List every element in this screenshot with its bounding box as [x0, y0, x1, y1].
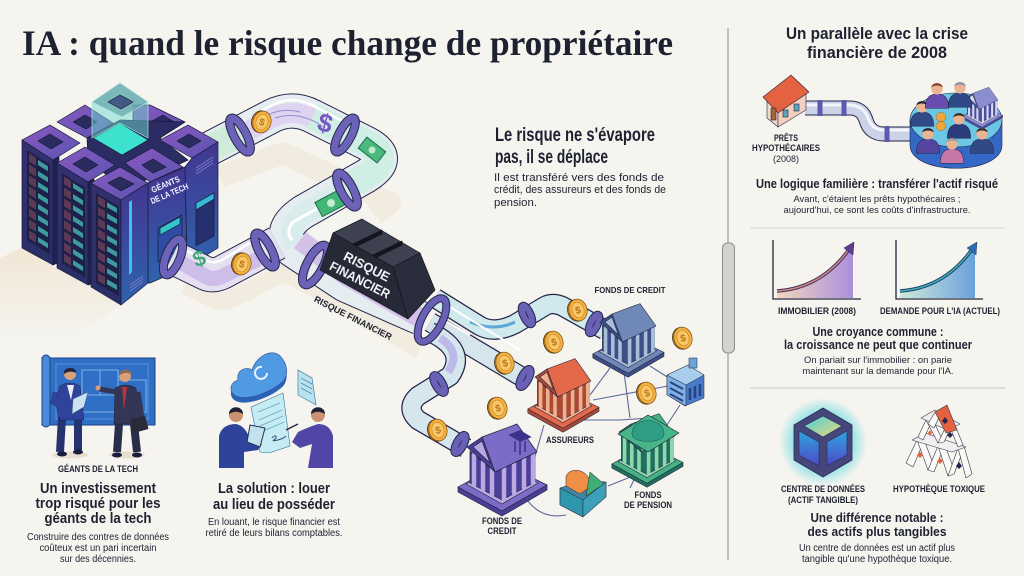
- cloud: [231, 353, 287, 403]
- icon: house of cards: [906, 405, 972, 478]
- heading: différence notable: des actifs plus tangibles: [808, 524, 946, 539]
- text: croyance description: maintenant sur la demande pour l'IA.: [802, 366, 954, 377]
- text: investment description: Construire des contres de données: [27, 532, 169, 543]
- bank icon on roof: [510, 431, 530, 455]
- text: risk transfer description: Il est transféré vers des fonds de: [494, 172, 664, 184]
- small building: teal office with orange block: [560, 470, 606, 517]
- rack 2: [57, 147, 115, 285]
- label: prêts hypothécaires: (2008): [773, 154, 799, 164]
- heading: le risque ne s'évapore: [495, 125, 655, 168]
- label: demande IA: DEMANDE POUR L'IA (ACTUEL): [880, 306, 1000, 317]
- text: investment description: [27, 532, 169, 565]
- label: centre de données: (ACTIF TANGIBLE): [788, 495, 858, 506]
- rack 4 with label: [125, 148, 190, 283]
- label: prêts hypothécaires: PRÊTS: [774, 132, 798, 143]
- icon: green banknote lower: [315, 189, 347, 217]
- label: prêts hypothécaires: HYPOTHÉCAIRES: [752, 143, 820, 153]
- rack 1: [22, 125, 80, 265]
- icon: gold coin in lower pipe: [229, 251, 254, 277]
- glowing cyan top: [93, 123, 148, 155]
- heading: investissement trop risqué: [36, 480, 160, 527]
- rack label: [145, 172, 190, 206]
- central dark block: [87, 120, 188, 190]
- rack 3: [91, 167, 148, 305]
- heading: 2008 parallel: Un parallèle avec la crise: [786, 24, 968, 43]
- blueprint: [42, 355, 155, 427]
- heading: différence notable: Une différence notable :: [810, 510, 944, 525]
- risk block label: RISQUE: [341, 249, 393, 285]
- text: risk transfer description: pension.: [494, 197, 537, 209]
- label: fonds de credit (bottom): [482, 516, 522, 536]
- heading: 2008 parallel: financière de 2008: [807, 43, 947, 62]
- coins around institutions: [425, 297, 695, 443]
- label: immobilier: IMMOBILIER (2008): [778, 306, 856, 317]
- title: IA : quand le risque change de propriétaire: [22, 23, 673, 63]
- text: logique description: aujourd'hui, ce sont les coûts d'infrastructure.: [784, 205, 970, 216]
- pipe: lower transfer pipe: [172, 243, 277, 278]
- pipe: upper transfer pipe: [205, 100, 420, 318]
- label: fonds de pension: DE PENSION: [624, 500, 672, 510]
- diagram: data centre racks and risk pipeline: [22, 83, 704, 517]
- text: solution description: En louant, le risque financier est: [208, 517, 340, 528]
- label: assureurs: ASSUREURS: [546, 435, 594, 445]
- label: fonds de credit (top): FONDS DE CREDIT: [594, 285, 666, 295]
- text: solution description: retiré de leurs bilans comptables.: [206, 528, 342, 539]
- heading: la solution: au lieu de posséder: [213, 496, 335, 513]
- text: investment description: coûteux est un pari incertain: [40, 543, 156, 554]
- network arrows: [524, 366, 680, 516]
- label: fonds de credit (bottom): FONDS DE: [482, 516, 522, 526]
- illustration: tech executives before blueprint: [42, 355, 155, 458]
- icon: green dollar: $: [189, 245, 209, 272]
- label: hypothèque toxique: HYPOTHÈQUE TOXIQUE: [893, 484, 985, 495]
- text: différence description: [799, 543, 955, 565]
- rack label: DE LA TECH: [149, 181, 190, 206]
- label: géants de la tech: GÉANTS DE LA TECH: [58, 464, 138, 475]
- small building: blue office: [667, 358, 704, 406]
- contract: [251, 393, 290, 453]
- pipe label: RISQUE FINANCIER: [312, 294, 394, 342]
- floor shadows: [52, 452, 88, 458]
- heading: la solution: [213, 480, 335, 513]
- man with briefcase: [96, 369, 149, 458]
- text: logique description: Avant, c'étaient les prêts hypothécaires ;: [794, 194, 960, 205]
- coins in the disc: [936, 112, 946, 130]
- pipe flange rings: [159, 115, 361, 288]
- label: fonds de credit (bottom): CREDIT: [488, 526, 517, 536]
- heading: croyance commune: Une croyance commune :: [812, 324, 944, 339]
- chart: demande IA: [896, 240, 983, 299]
- text: logique description: [784, 194, 970, 216]
- house: [763, 75, 809, 127]
- person left: [219, 407, 265, 468]
- text: différence description: tangible qu'une hypothèque toxique.: [802, 554, 952, 565]
- rack: back right: [133, 105, 185, 138]
- illustration: leasing contract with cloud: [219, 353, 333, 468]
- icon: purple dollar: $: [314, 107, 337, 139]
- investors disc: [910, 93, 1002, 168]
- heading: différence notable: [808, 510, 946, 539]
- pipe: [805, 100, 915, 142]
- label: centre de données: CENTRE DE DONNÉES: [781, 484, 865, 495]
- heading: investissement trop risqué: Un investissement: [40, 480, 156, 497]
- bank: orange insurers: [528, 359, 599, 432]
- investor figures: [910, 82, 994, 163]
- rack: back left: [57, 105, 113, 138]
- icon: green banknote: [358, 137, 386, 163]
- heading: la solution: La solution : louer: [218, 480, 330, 497]
- illustration: mortgage pipe to investors: [763, 75, 1003, 168]
- label: centre de données: [781, 484, 865, 506]
- label: fonds de pension: FONDS: [634, 490, 662, 500]
- heading: investissement trop risqué: géants de la tech: [44, 510, 152, 527]
- risk block label: FINANCIER: [327, 258, 393, 302]
- bank: blue credit fund: [593, 304, 664, 377]
- racks: [22, 83, 218, 305]
- heading: le risque ne s'évapore: Le risque ne s'évapore: [495, 125, 655, 146]
- text: risk transfer description: crédit, des assureurs et des fonds de: [494, 184, 666, 196]
- shadow under racks and pipes: [0, 153, 420, 350]
- pipe rings on branches: [412, 294, 601, 454]
- text: solution description: [206, 517, 342, 539]
- risk block: [320, 219, 435, 319]
- person right: [286, 407, 333, 468]
- text: croyance description: [802, 355, 954, 377]
- icon: gold coin in pipe: [249, 109, 274, 135]
- bank: purple credit fund: [458, 424, 547, 516]
- heading: croyance commune: [784, 324, 972, 352]
- heading: croyance commune: la croissance ne peut que continuer: [784, 337, 972, 352]
- text: croyance description: On pariait sur l'immobilier : on parie: [804, 355, 952, 366]
- bank: green pension fund: [612, 414, 683, 487]
- label: prêts hypothécaires: [752, 132, 820, 164]
- text: risk transfer description: [494, 172, 666, 209]
- branch pipes to institutions: [412, 298, 605, 448]
- panel divider with handle: [722, 28, 734, 560]
- chart: immobilier 2008: [773, 240, 861, 299]
- icon: glowing data centre cube: [779, 398, 867, 486]
- text: investment description: sur des décennies.: [60, 554, 136, 565]
- text: différence description: Un centre de données est un actif plus: [799, 543, 955, 554]
- heading: le risque ne s'évapore: pas, il se déplace: [495, 147, 608, 168]
- small document: [298, 370, 316, 405]
- mini bank: [962, 87, 1003, 130]
- man with tablet: [53, 368, 88, 456]
- label: fonds de pension: [624, 490, 672, 510]
- heading: 2008 parallel: [786, 24, 968, 62]
- rack label: GÉANTS: [150, 174, 181, 195]
- rack 5: [160, 125, 218, 267]
- heading: investissement trop risqué: trop risqué pour les: [36, 495, 160, 512]
- glass cube: [92, 83, 148, 138]
